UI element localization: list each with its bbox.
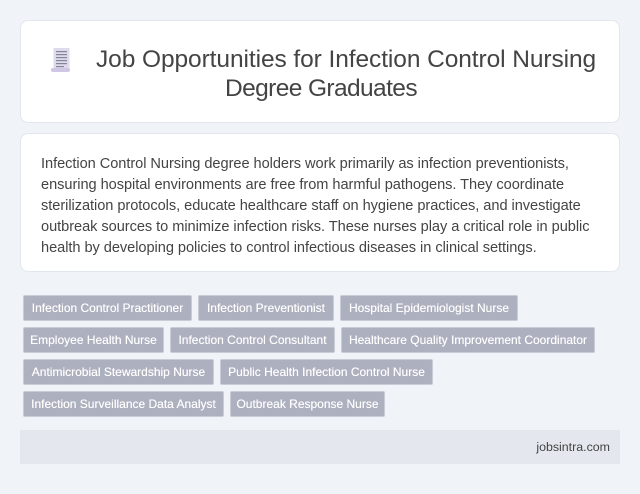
tag: Healthcare Quality Improvement Coordinator <box>349 333 587 347</box>
tag <box>230 391 385 417</box>
title: Degree Graduates <box>225 75 417 102</box>
icon: document scroll <box>51 48 70 72</box>
description text: health by developing policies to control infectious diseases in clinical settings. <box>41 240 537 256</box>
tag: Hospital Epidemiologist Nurse <box>349 301 509 315</box>
tag: Infection Control Practitioner <box>32 301 183 315</box>
footer bar <box>20 430 620 464</box>
description text: sterilization protocols, educate healthcare staff on hygiene practices, and investigate <box>41 198 581 214</box>
tag <box>220 359 433 385</box>
tag: Antimicrobial Stewardship Nurse <box>32 365 205 379</box>
tag: Employee Health Nurse <box>30 333 157 347</box>
description text: ensuring hospital environments are free from harmful pathogens. They coordinate <box>41 177 564 193</box>
title <box>96 46 596 102</box>
tag <box>23 327 164 353</box>
tag: Infection Preventionist <box>207 301 325 315</box>
job title tags <box>23 295 595 417</box>
description text <box>41 156 590 256</box>
tag: Infection Control Consultant <box>178 333 327 347</box>
tag <box>341 327 595 353</box>
description panel <box>20 133 620 272</box>
footer source text: jobsintra.com <box>536 440 610 454</box>
description text: Infection Control Nursing degree holders work primarily as infection preventionists, <box>41 156 569 172</box>
header panel <box>20 20 620 123</box>
tag: Infection Surveillance Data Analyst <box>31 397 216 411</box>
tag <box>23 359 214 385</box>
description text: outbreak sources to minimize infection risks. These nurses play a critical role in public <box>41 219 589 235</box>
tag <box>198 295 334 321</box>
tag <box>340 295 518 321</box>
tag: Public Health Infection Control Nurse <box>228 365 425 379</box>
tag: Outbreak Response Nurse <box>236 397 379 411</box>
tag <box>23 295 192 321</box>
tag <box>23 391 224 417</box>
title: Job Opportunities for Infection Control Nursing <box>96 46 596 73</box>
tag <box>170 327 335 353</box>
